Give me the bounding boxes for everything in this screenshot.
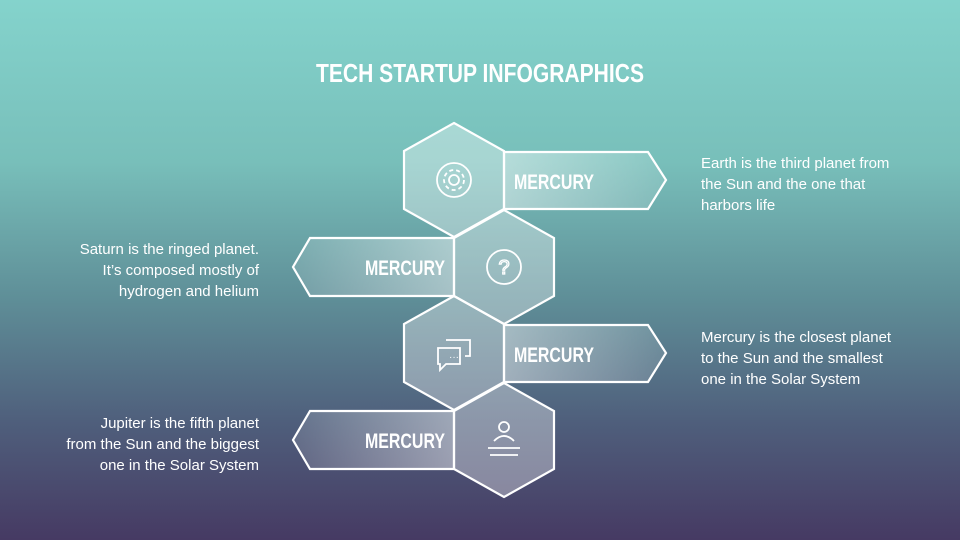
arrow 4: MERCURY [365,430,445,453]
hexagon 1 with gear icon [404,123,504,237]
arrow 2: MERCURY [365,257,445,280]
arrow 3 [504,325,666,382]
arrow 2 [293,238,454,296]
text: saturn [80,241,260,300]
hexagon 4 with tools icon [454,383,554,497]
title: TECH STARTUP INFOGRAPHICS [316,58,644,88]
arrow 4 [293,411,454,469]
arrow 3: MERCURY [514,344,594,367]
text: earth: harbors life [701,197,775,214]
text: mercury: Mercury is the closest planet [701,329,891,346]
text: mercury [701,329,891,388]
hexagon 3 with chat icon [404,296,504,410]
text: earth: Earth is the third planet from [701,155,889,172]
arrow 1: MERCURY [514,171,594,194]
text: earth [701,155,889,214]
text: saturn: hydrogen and helium [119,283,259,300]
text: saturn: Saturn is the ringed planet. [80,241,259,258]
arrow 1 [504,152,666,209]
hexagon 3 with chat icon: ··· [449,352,459,363]
text: jupiter: one in the Solar System [100,457,259,474]
text: jupiter: from the Sun and the biggest [66,436,259,453]
text: saturn: It’s composed mostly of [103,262,259,279]
hexagon 2 with question icon [454,210,554,324]
hexagon 2 with question icon: ? [498,257,510,279]
text: jupiter [66,415,259,474]
text: earth: the Sun and the one that [701,176,865,193]
text: mercury: one in the Solar System [701,371,860,388]
text: mercury: to the Sun and the smallest [701,350,883,367]
text: jupiter: Jupiter is the fifth planet [101,415,259,432]
